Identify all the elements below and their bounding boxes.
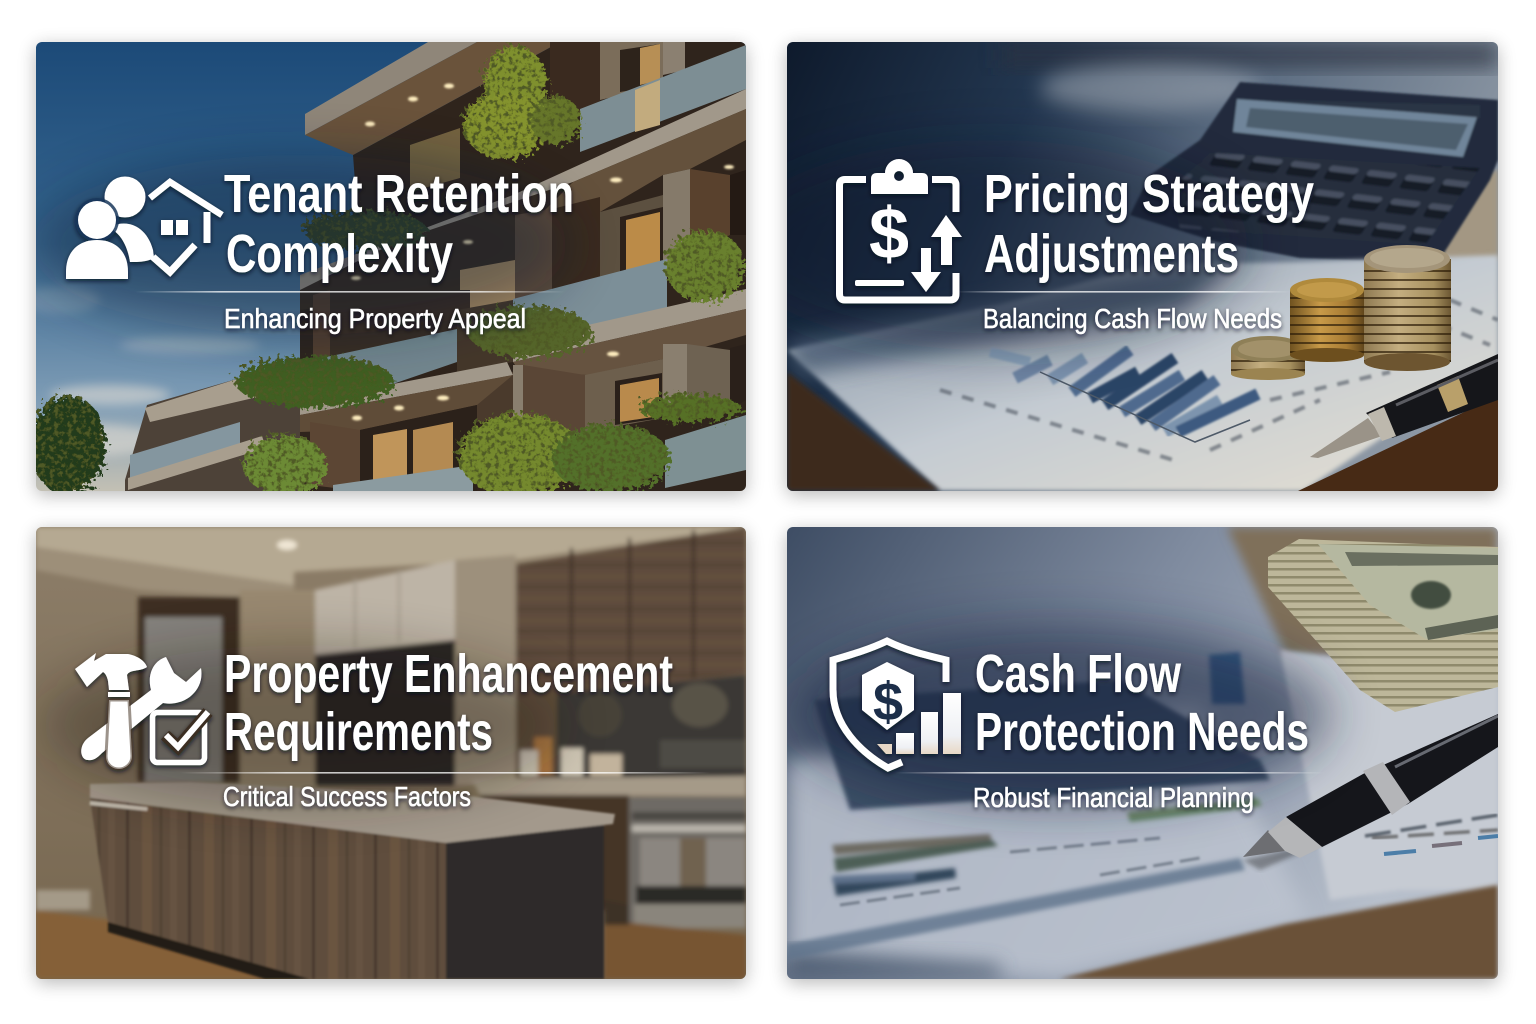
subtitle: Robust Financial Planning [973, 782, 1254, 813]
photo: blurred modern kitchen [36, 527, 746, 979]
heading: Pricing Strategy [984, 164, 1314, 224]
icon: clipboard with dollar and arrows: $ [869, 194, 909, 274]
heading: Property Enhancement [224, 644, 673, 704]
photo: financial papers, banknotes and pen [787, 527, 1498, 979]
heading [975, 644, 1309, 762]
panel: pricing strategy adjustments [730, 42, 1498, 491]
photo: calculator, coins and chart on desk [730, 42, 1498, 491]
heading: Adjustments [984, 224, 1239, 284]
icon: hammer, wrench and checkbox [75, 653, 208, 769]
panel: tenant retention complexity [20, 42, 746, 497]
heading [224, 644, 673, 762]
icon: shield with dollar and bar chart [833, 641, 961, 768]
photo: apartment building at dusk [20, 42, 746, 497]
heading [984, 164, 1314, 284]
icon: clipboard with dollar and arrows [840, 159, 962, 300]
panel: cash flow protection needs [787, 527, 1498, 979]
heading [224, 164, 574, 284]
heading: Cash Flow [975, 644, 1182, 704]
heading: Tenant Retention [224, 164, 574, 224]
subtitle: Balancing Cash Flow Needs [983, 303, 1282, 334]
subtitle: Enhancing Property Appeal [224, 303, 526, 334]
heading: Complexity [226, 224, 453, 284]
icon: tenants, house and check [66, 176, 222, 279]
heading: Protection Needs [975, 702, 1309, 762]
subtitle: Critical Success Factors [223, 781, 471, 812]
icon: shield with dollar and bar chart: $ [873, 672, 903, 732]
heading: Requirements [224, 702, 493, 762]
panel: property enhancement requirements [36, 527, 746, 979]
